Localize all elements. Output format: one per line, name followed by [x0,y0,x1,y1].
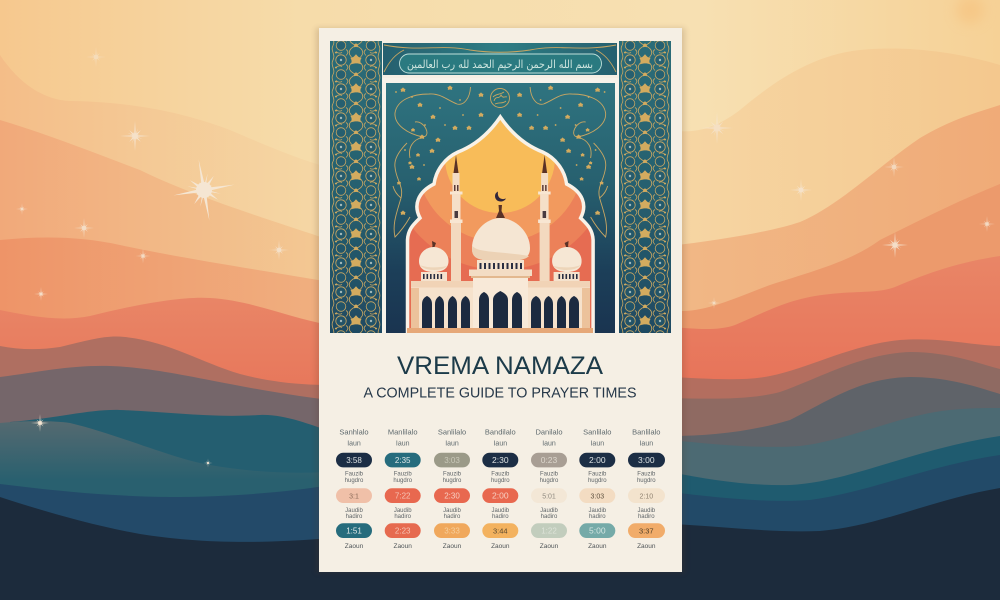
column 6 [579,428,615,550]
poster card [319,28,682,572]
column 6: 5:00 [589,526,606,536]
column 6: hugdro [588,478,607,484]
column 5: Iaun [542,440,556,448]
left ornamental border panel [330,41,382,333]
column 1: hugdro [345,478,364,484]
title: VREMA NAMAZA [397,352,603,380]
poster shadow [316,28,685,573]
column 3: Jaudib [443,508,462,514]
column 3: Sanlilalo [438,428,466,436]
column 6: Sanlilalo [583,428,611,436]
left minaret [450,155,462,281]
column 2: Jaudib [394,508,412,514]
column 3: Iaun [445,440,459,448]
main dome finial [496,205,505,218]
column 7: 3:37 [639,526,654,536]
column 2: 2:35 [395,456,411,465]
column 6: 2:00 [589,455,606,465]
column 3: 2:30 [444,492,460,500]
column 3: 3:03 [444,456,460,465]
column 5: Danilalo [535,428,563,436]
column 3 [434,428,470,550]
column 3: 3:33 [444,526,460,536]
column 3: Fauzib [443,472,462,478]
column 2: hugdro [393,478,413,484]
mosque illustration [407,155,593,333]
crescent [495,192,506,202]
prayer times table [336,428,665,550]
column 7: Iaun [639,440,653,448]
roundel emblem [490,88,510,108]
gold vines and flowers, right half [517,85,608,237]
right ornamental border panel [619,41,671,333]
column 6: 3:03 [590,494,604,500]
column 1 [336,428,372,550]
column 3: Zaoun [443,543,462,550]
column 5: Fauzib [540,472,559,478]
column 5: hugdro [540,478,559,484]
arch outline [408,117,593,333]
column 2 [385,428,421,550]
column 2: hadiro [394,514,412,520]
column 6: hadiro [589,514,606,520]
arches [422,291,579,329]
gold vines and flowers, left half [393,85,484,237]
main dome [472,218,530,261]
right small dome [552,241,582,281]
side wings [411,281,590,328]
column 2: Manlilalo [388,428,418,436]
subtitle: A COMPLETE GUIDE TO PRAYER TIMES [364,384,636,402]
arch window with sun [409,120,592,328]
column 1: Jaudib [345,508,364,514]
column 4: Fauzib [491,472,510,478]
central block with cornice [469,270,532,328]
column 2: Iaun [396,440,410,448]
column 6: Jaudib [588,508,607,514]
column 4: Bandilalo [485,428,516,436]
column 7: 2:10 [639,494,653,500]
right minaret [538,155,551,281]
column 2: Fauzib [394,472,412,478]
mosque base [407,328,593,333]
column 5: 1:22 [541,526,557,536]
column 1: Iaun [347,440,361,448]
column 4: 2:00 [492,490,509,500]
column 7: Banlilalo [632,428,660,436]
central arch panel [386,83,615,333]
column 1: 3:58 [346,456,362,465]
column 4 [482,428,518,550]
column 6: Fauzib [588,472,607,478]
column 1: hadiro [346,514,363,520]
column 7 [628,428,665,550]
column 4: Zaoun [491,543,510,550]
column 4: Jaudib [491,508,510,514]
column 2: 2:23 [395,526,411,536]
calligraphy text: بسم الله الرحمن الرحيم الحمد لله رب العالمين [407,58,593,71]
column 4: 2:30 [492,455,509,465]
column 7: Jaudib [637,508,656,514]
column 3: hugdro [443,478,462,484]
column 6: Iaun [590,440,604,448]
column 7: 3:00 [638,455,655,465]
background: navy ground under poster [320,520,680,600]
calligraphy cartouche [400,54,602,73]
column 7: Fauzib [637,472,656,478]
background: right wave layers [670,49,1000,600]
column 5: Jaudib [540,508,558,514]
left small dome [419,241,448,281]
column 1: Fauzib [345,472,364,478]
column 6: Zaoun [588,543,607,550]
column 5: 0:23 [541,455,558,465]
column 5 [531,428,567,550]
background: sun glow [956,0,984,24]
column 7: hadiro [638,514,655,520]
column 7: Zaoun [637,543,656,550]
column 4: hugdro [491,478,510,484]
column 1: 3:1 [349,494,359,500]
column 4: hadiro [492,514,509,520]
column 1: Zaoun [345,543,364,550]
top calligraphy band [383,43,617,75]
column 7: hugdro [637,478,656,484]
column 3: hadiro [444,514,461,520]
column 1: Sanhlalo [339,428,369,436]
column 5: 5:01 [542,494,556,500]
column 1: 1:51 [346,526,362,536]
column 5: hadiro [541,514,558,520]
background: left wave layers [0,55,330,600]
column 2: Zaoun [393,543,412,550]
stars [16,47,995,468]
column 5: Zaoun [540,543,559,550]
main dome drum [477,260,524,270]
column 4: 3:44 [493,526,508,536]
column 4: Iaun [493,440,507,448]
column 2: 7:22 [395,492,411,500]
